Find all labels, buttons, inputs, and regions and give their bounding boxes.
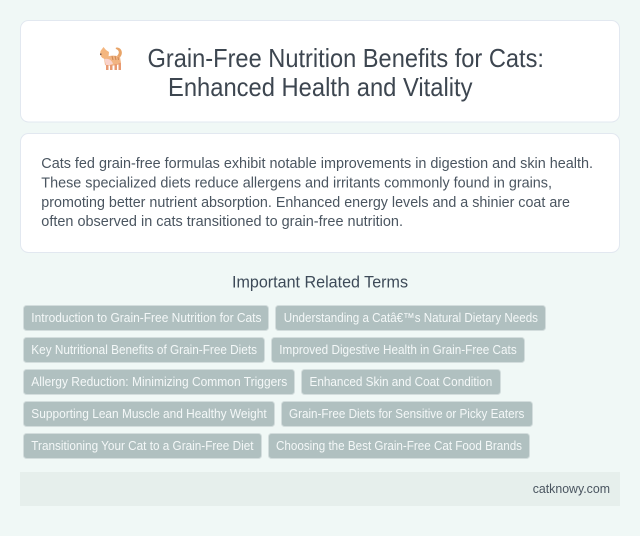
tag: picky eaters (282, 402, 532, 426)
tag: choosing brands (268, 434, 530, 458)
tag: introduction: Introduction to Grain-Free Nutrition for Cats (31, 310, 261, 325)
tag: skin and coat (302, 370, 500, 394)
summary paragraph: These specialized diets reduce allergens and irritants commonly found in grains, (41, 174, 552, 192)
summary paragraph: promoting better nutrient absorption. Enhanced energy levels and a shinier coat are (41, 194, 570, 211)
tag: digestive health: Improved Digestive Health in Grain-Free Cats (279, 342, 517, 357)
tag: natural dietary needs (276, 306, 546, 330)
tag: skin and coat: Enhanced Skin and Coat Condition (310, 374, 492, 389)
tag group: related terms (24, 306, 546, 458)
tag: key benefits (24, 338, 264, 362)
tag: picky eaters: Grain-Free Diets for Sensitive or Picky Eaters (289, 406, 524, 421)
title (148, 45, 544, 102)
tag: transitioning (24, 434, 262, 458)
footer site name: catknowy.com (533, 481, 610, 496)
tag: lean muscle: Supporting Lean Muscle and Healthy Weight (31, 406, 267, 421)
tag: natural dietary needs: Understanding a Catâ€™s Natural Dietary Needs (284, 310, 538, 325)
tag: introduction (24, 306, 268, 330)
summary paragraph: often observed in cats transitioned to grain-free nutrition. (41, 213, 403, 230)
icon: cat (100, 47, 122, 70)
footer (20, 472, 620, 506)
tag: key benefits: Key Nutritional Benefits of Grain-Free Diets (31, 342, 257, 357)
panel: summary (20, 134, 620, 252)
tag: allergy reduction: Allergy Reduction: Minimizing Common Triggers (31, 374, 287, 389)
tag: choosing brands: Choosing the Best Grain-Free Cat Food Brands (276, 438, 522, 453)
summary paragraph (41, 155, 593, 230)
summary paragraph: Cats fed grain-free formulas exhibit notable improvements in digestion and skin health. (41, 155, 593, 172)
title: Grain-Free Nutrition Benefits for Cats: (148, 45, 544, 73)
title: Enhanced Health and Vitality (168, 74, 473, 102)
panel: title card (20, 20, 620, 122)
tag: lean muscle (24, 402, 274, 426)
tag: transitioning: Transitioning Your Cat to a Grain-Free Diet (31, 438, 254, 453)
tag: allergy reduction (24, 370, 294, 394)
tag: digestive health (272, 338, 524, 362)
heading: related terms: Important Related Terms (232, 274, 408, 292)
